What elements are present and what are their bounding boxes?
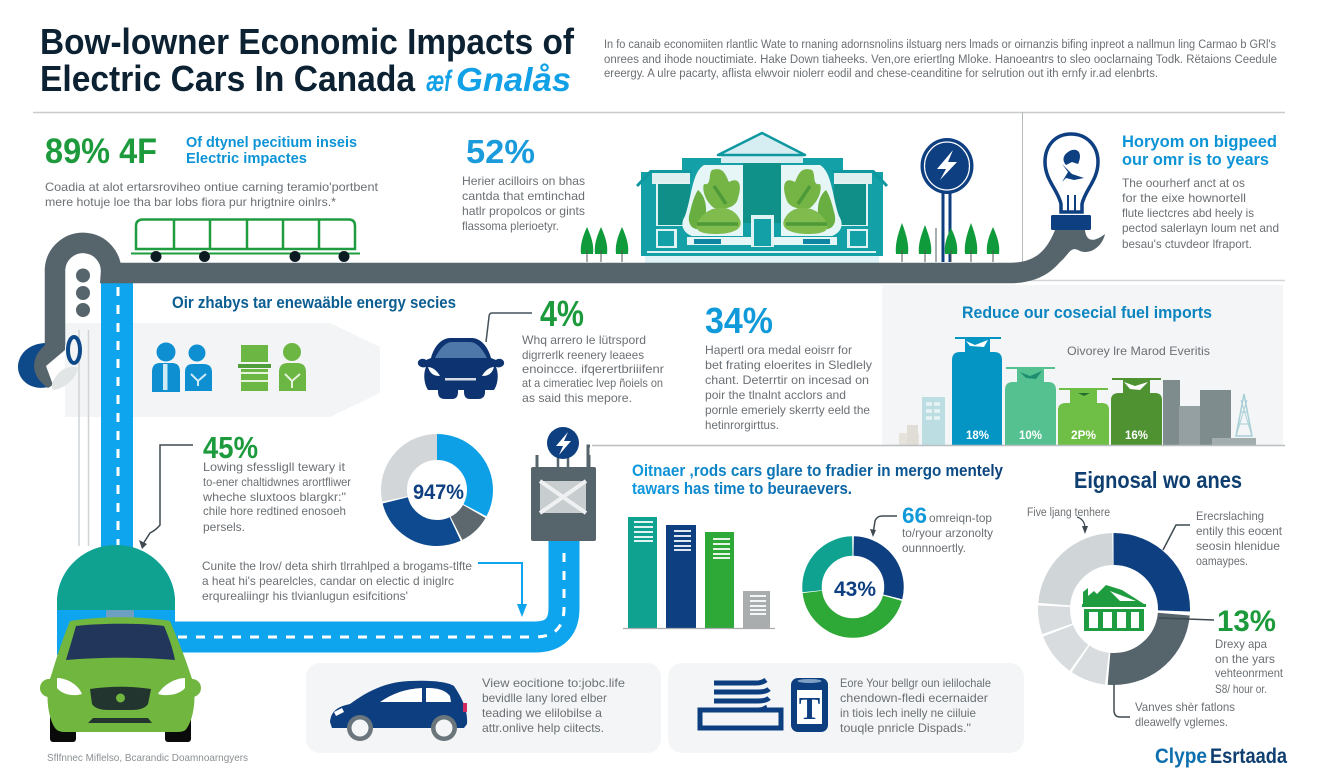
cylinder 10%: 10% (1019, 428, 1042, 442)
heading: middle chart: Oitnaer ,rods cars glare to fradier in mergo mentely (632, 462, 1004, 480)
heading: renewable energy: Oir zhabys tar enewaäble energy secies (172, 294, 456, 312)
panel: 34% stat: chant. Deterrtir on incesad on (705, 373, 869, 387)
callout: 13%: vehteonrment (1215, 666, 1284, 680)
logo: Clype (1155, 745, 1207, 768)
grey road (55, 230, 1066, 345)
text block: lower road note (202, 559, 472, 603)
callouts: regional donut: Erecrslaching (1196, 509, 1264, 523)
panel: 34% stat: Hapertl ora medal eoisrr for (705, 343, 852, 357)
panel: bulb text: our omr is to years (1122, 150, 1269, 169)
icon: government building with leaves (636, 133, 888, 263)
callouts: regional donut: entily this eoœnt (1196, 524, 1283, 538)
callout: lower regional: Vanves shèr fatlons (1135, 700, 1235, 714)
panel: bulb text (1122, 132, 1279, 251)
panel: 4% stat: 4% (540, 293, 584, 334)
callouts: regional donut: oamaypes. (1196, 554, 1248, 568)
callout: 13%: S8/ hour or. (1215, 682, 1267, 696)
panel: 34% stat: bet frating eloerites in Sledlely (705, 358, 872, 372)
panel: bottom car: teading we elilobilse a (482, 706, 602, 720)
cylinder 18%: 18% (966, 428, 989, 442)
panel: 4% stat: digrrerlk reenery leaees (522, 348, 644, 362)
icon: green factory (1082, 585, 1146, 631)
icon: layered stack (700, 680, 781, 728)
panel: bottom car: bevidlle lany lored elber (482, 691, 607, 705)
text block: lower road note: a heat hi's pearelcles, candar on electic d iniglrc (202, 574, 454, 588)
panel: bottom car: attr.onlive help ciitects. (482, 721, 604, 735)
icon: green train (131, 220, 360, 262)
callout: lower regional: dleawelfy vglemes. (1135, 715, 1228, 729)
panel: bottom car: View eocitione to:jobc.life (482, 676, 625, 690)
panel: 52% stat (462, 133, 585, 233)
callout: 66 (870, 503, 993, 555)
panel: bulb text: for the eixe hownortell (1122, 191, 1246, 205)
intro paragraph (604, 39, 1277, 80)
panel: 89% stat: 89% 4F (45, 132, 157, 171)
panel: bulb text: The oourherf anct at os (1122, 176, 1245, 190)
callout: 66: 66 (902, 503, 927, 528)
blue road: bottom (120, 535, 564, 637)
icon: trees right (896, 223, 999, 262)
callouts: regional donut (1027, 507, 1283, 568)
icon: trees left (581, 227, 628, 262)
title (40, 21, 575, 99)
title: Electric Cars In Canada (40, 58, 416, 99)
panel: bottom stack and battery: Eore Your bellgr oun ielilochale (840, 676, 991, 690)
panel: 89% stat: Coadia at alot ertarsroviheo ontiue carning teramio'portbent (45, 180, 379, 194)
icon: people blue (152, 342, 212, 392)
panel: 4% stat: at a cimeratiec lvep ñoiels on (522, 376, 663, 390)
panel: bottom stack and battery: in tiois lech inelly ne ciiluie (840, 706, 976, 720)
panel: 4% stat (522, 293, 664, 405)
panel: bulb text: flute liectcres abd heely is (1122, 206, 1254, 220)
title: Gnalås (456, 61, 571, 98)
icon: navy car front (418, 313, 532, 399)
icon: people green (238, 343, 306, 391)
intro paragraph: onrees and ihode nouctimiate. Hake Down tiaheeks. Ven,ore eriertlng Mloke. Hanoeantrs to sleo ooclarnaing Todk. Rëtaions Ceedule (604, 54, 1277, 66)
panel: 89% stat: Electric impactes (186, 151, 307, 167)
renewable panel background (65, 323, 380, 417)
cylinder 18% (952, 337, 1002, 445)
panel: 52% stat: Herier acilloirs on bhas (462, 174, 585, 188)
panel: 34% stat: pornle emeriely skerrty eeld the (705, 403, 870, 417)
panel: 89% stat: mere hotuje loe tha bar lobs fiora pur hrigtnire oinlrs.* (45, 195, 336, 209)
callout: 13%: Drexy apa (1215, 637, 1267, 651)
icon: road hook (18, 337, 80, 390)
title: æf (426, 65, 453, 98)
callout: 13%: on the yars (1215, 652, 1275, 666)
icon: charging sign (920, 138, 974, 262)
panel: 45% stat: to-ener chaltidwnes arortfliwer (203, 475, 351, 489)
callout: lower regional (1114, 685, 1235, 729)
panel: 45% stat: wheche sluxtoos blargkr:" (202, 490, 346, 504)
callouts: regional donut: Five ljang tenhere (1027, 507, 1110, 519)
callouts: regional donut: seosin hlenidue (1196, 539, 1280, 553)
bar chart (623, 517, 775, 628)
callout: 13%: 13% (1217, 605, 1276, 638)
panel: bottom stack and battery (668, 663, 1024, 753)
panel: 45% stat: chile hore redtined enosoeh (203, 504, 346, 518)
panel: 45% stat: 45% (203, 430, 258, 465)
charging dome (57, 545, 175, 655)
intro paragraph: ereergy. A ulre pacarty, aflista elwvoir niolerr eodil and chese-ceanditine for selrution out ith ernfy ir.ad elenbrts. (604, 68, 1158, 80)
logo: Esrtaada (1210, 745, 1287, 768)
panel: bottom car (306, 663, 661, 753)
text block: lower road note: Cunite the lrov/ deta shirh tlrrahlped a brogams-tlfte (202, 559, 472, 573)
icon: charging box (531, 427, 596, 541)
panel: 4% stat: as said this mepore. (522, 391, 632, 405)
icon: battery T: T (799, 690, 820, 726)
donut chart: 43% (812, 546, 894, 628)
panel: 45% stat: Lowing sfessligll tewary it (203, 460, 346, 474)
callout: 13% (1159, 605, 1284, 696)
text block: lower road note: erqurealiingr his tlvianlugun esifcitions' (202, 589, 408, 603)
icon: light bulb (1045, 134, 1105, 262)
panel: bottom stack and battery: touqle pnricle Dispads." (840, 721, 971, 735)
cylinder 2P% (1058, 388, 1109, 445)
panel: bulb text: besau's ctuvdeor lfraport. (1122, 237, 1252, 251)
heading: regional: Eignosal wo anes (1074, 467, 1242, 493)
icon: blue side car (330, 681, 467, 741)
title: Bow-lowner Economic Impacts of (40, 21, 575, 62)
panel: 34% stat (705, 300, 872, 432)
panel: bottom stack and battery: chendown-fledi ecernaider (840, 691, 988, 705)
panel: 52% stat: cantda that emtinchad (462, 189, 585, 203)
cylinder 2P%: 2P% (1071, 428, 1096, 442)
footer note: Sflfnnec Miflelso, Bcarandic Doamnoarngyers (47, 752, 248, 764)
heading: middle chart (632, 462, 1004, 498)
panel: 4% stat: enoincce. ifqerertbriiifenr (522, 362, 664, 376)
icon: green car (40, 617, 201, 742)
callout: 66: ounnnoertly. (902, 541, 966, 555)
panel: 34% stat: hetinrorgirttus. (705, 418, 779, 432)
panel: fuel imports chart (882, 285, 1283, 445)
panel: bulb text: Horyom on bigpeed (1122, 132, 1277, 151)
arrow: blue to road (478, 563, 527, 617)
callout: 66: omreiqn-top (929, 511, 992, 525)
panel: 45% stat: persels. (203, 520, 245, 534)
intro paragraph: In fo canaib economiiten rlantlic Wate to rnaning adornsnolins ilstuarg ners lmads or oirnanzis bifing inpreot a nallmun ling Carmao b GRl's (604, 39, 1276, 51)
donut chart: 947% (394, 447, 480, 533)
panel: bulb text: pectod salerlayn loum net and (1122, 221, 1279, 235)
panel: 52% stat: flassoma plerioetyr. (462, 219, 559, 233)
cylinder 16%: 16% (1125, 428, 1148, 442)
logo (1155, 745, 1287, 768)
panel: 89% stat (45, 132, 379, 209)
donut chart: regional (1054, 549, 1174, 669)
cylinder 16% (1111, 378, 1162, 445)
heading: middle chart: tawars has time to beuraevers. (632, 480, 852, 498)
panel: 45% stat (139, 430, 351, 549)
blue road: upper vertical (101, 272, 133, 557)
panel: 89% stat: Of dtynel pecitium inseis (186, 135, 357, 151)
donut chart: 947%: 947% (413, 481, 464, 504)
panel: 52% stat: hatlr propolcos or gints (462, 204, 585, 218)
icon: traffic dots (76, 268, 90, 317)
panel: 34% stat: 34% (705, 300, 773, 341)
panel: 4% stat: Whq arrero le lütrspord (522, 333, 646, 347)
donut chart: 43%: 43% (834, 578, 876, 601)
panel: fuel imports chart: Reduce our cosecial fuel imports (962, 304, 1212, 322)
panel: 34% stat: poir the tlnalnt acclors and (705, 388, 846, 402)
panel: 52% stat: 52% (466, 133, 535, 170)
icon: battery T (791, 678, 828, 732)
callout: 66: to/ryour arzonolty (902, 526, 993, 540)
panel: fuel imports chart: Oivorey lre Marod Everitis (1067, 344, 1210, 358)
cylinder 10% (1005, 367, 1056, 445)
